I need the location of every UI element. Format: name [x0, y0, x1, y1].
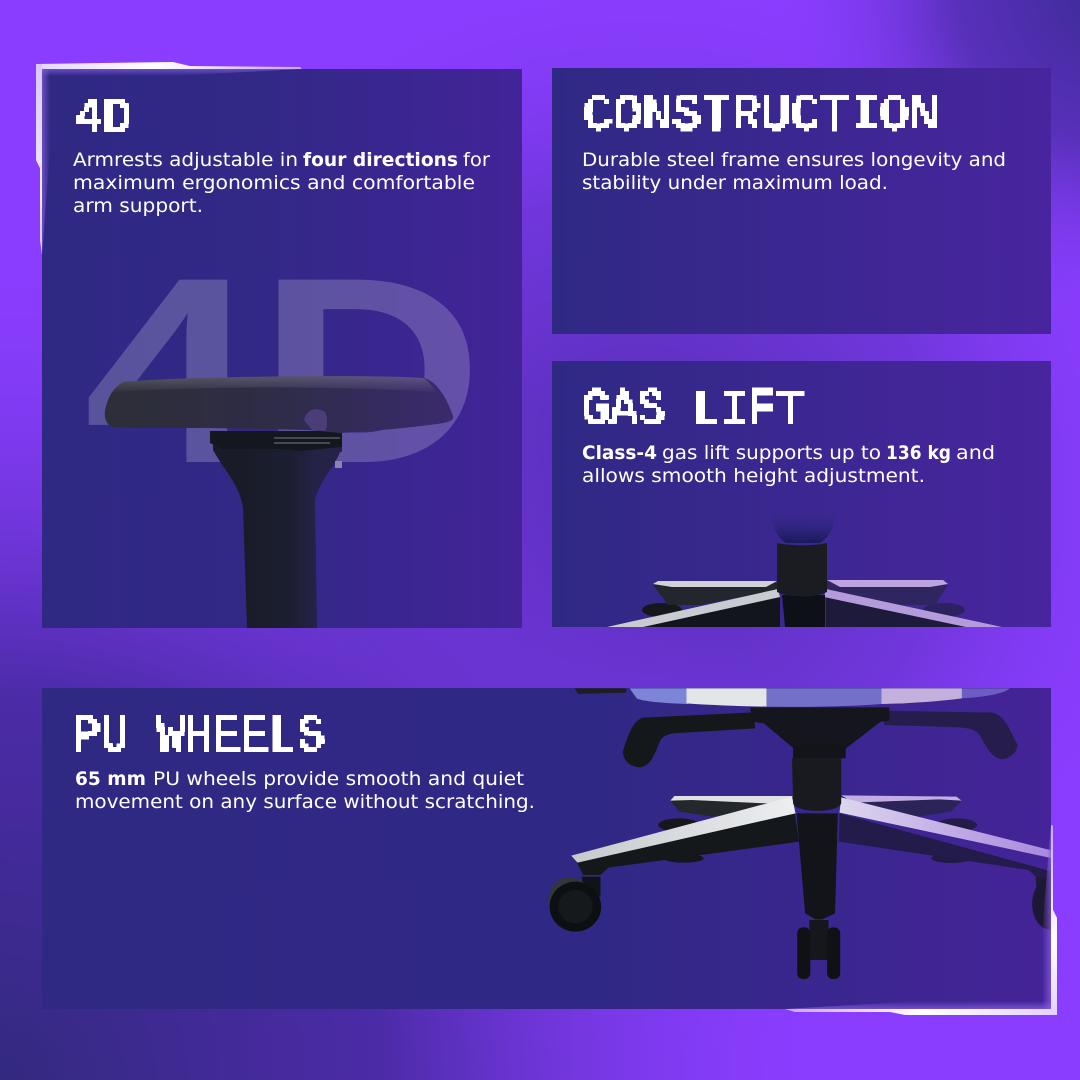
front left leg	[571, 797, 799, 875]
text: gas lift description: and	[956, 442, 995, 464]
heading: PU wheels: PU WHEELS	[73, 709, 325, 766]
text: armrests description: Armrests adjustable in	[73, 149, 298, 171]
watermark: large 4D: 4D	[84, 223, 483, 519]
text: gas lift description: allows smooth height adjustment.	[582, 465, 925, 487]
text: PU wheels description: PU wheels provide smooth and quiet	[153, 768, 524, 790]
illustration: gas lift cylinder and base	[607, 512, 1002, 627]
text: construction description	[582, 149, 1006, 194]
seat underside	[575, 688, 1010, 707]
caster: front wheel	[797, 813, 840, 979]
illustration: chair base with wheels	[548, 688, 1070, 979]
text: armrests description: four directions	[303, 149, 458, 171]
text: gas lift description: gas lift supports up to	[662, 442, 881, 464]
corner glow: top-left frame	[36, 62, 302, 255]
panel: 4D armrest	[36, 62, 522, 628]
corner glow: bottom-right frame	[785, 825, 1057, 1015]
panel: PU wheels	[42, 688, 1070, 1015]
caster: left wheel	[548, 877, 601, 932]
text: PU wheels description	[75, 768, 535, 813]
text: armrests description: for	[463, 149, 490, 171]
text: armrests description	[73, 149, 490, 217]
seat mechanism and arms	[623, 707, 1018, 767]
illustration: armrest	[105, 376, 453, 628]
text: armrests description: maximum ergonomics and comfortable	[73, 172, 475, 194]
text: PU wheels description: 65 mm	[75, 768, 146, 790]
text: armrests description: arm support.	[73, 195, 203, 217]
text: gas lift description	[582, 442, 995, 487]
text: construction description: Durable steel frame ensures longevity and	[582, 149, 1006, 171]
heading: construction: CONSTRUCTION	[583, 88, 939, 145]
text: gas lift description: Class-4	[582, 442, 657, 464]
text: PU wheels description: movement on any surface without scratching.	[75, 791, 535, 813]
text: construction description: stability under maximum load.	[582, 172, 888, 194]
rear base legs	[658, 795, 977, 863]
front right leg	[839, 797, 1053, 877]
heading: 4D: 4D	[74, 91, 131, 148]
caster: right wheel	[1032, 876, 1051, 930]
panel: construction	[552, 68, 1051, 334]
text: gas lift description: 136 kg	[886, 442, 951, 464]
gas cylinder	[792, 758, 841, 811]
heading: gas lift: GAS LIFT	[582, 382, 804, 439]
panel: gas lift	[552, 361, 1051, 627]
